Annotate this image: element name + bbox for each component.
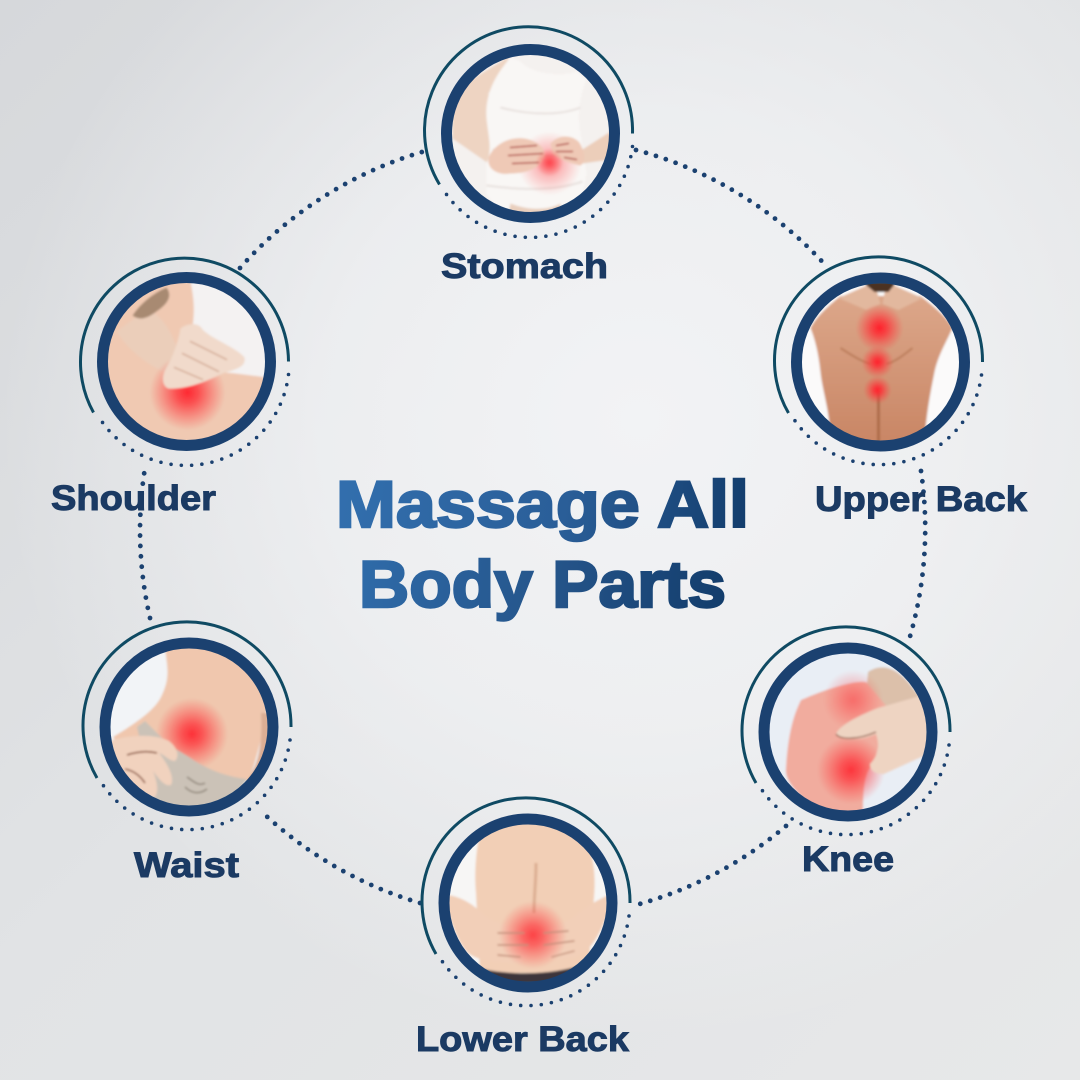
photo: upper back (800, 282, 960, 442)
dotted arc: shoulder (100, 374, 288, 465)
dotted arc: waist (103, 740, 290, 830)
ring: upper back (796, 278, 964, 446)
panel: upper back (775, 257, 983, 465)
dotted arc: lower back (442, 916, 629, 1006)
photo: shoulder (106, 282, 266, 442)
dotted connector circle (140, 150, 925, 905)
photo: lower back (448, 823, 608, 983)
ring: stomach (446, 50, 614, 218)
arc: shoulder (81, 258, 288, 413)
panel: knee (742, 627, 950, 835)
arc: lower back (422, 798, 630, 954)
label: stomach: Stomach (441, 247, 608, 286)
title (336, 467, 749, 621)
ring: knee (764, 648, 932, 816)
ring: lower back (444, 819, 612, 987)
label: waist: Waist (134, 846, 239, 885)
label: lower back: Lower Back (416, 1020, 630, 1059)
arc: knee (742, 627, 950, 783)
panel: waist (83, 622, 291, 830)
dotted arc: stomach (444, 146, 632, 237)
photo: waist (109, 647, 269, 807)
dotted arc: upper back (794, 375, 982, 465)
arc: waist (83, 622, 291, 778)
ring: waist (105, 643, 273, 811)
photo: knee (785, 666, 926, 810)
panel: lower back (422, 798, 630, 1006)
title: Massage All (336, 467, 749, 541)
ring: shoulder (102, 278, 270, 446)
label: shoulder: Shoulder (51, 479, 216, 518)
arc: stomach (425, 27, 633, 184)
dotted arc: knee (762, 745, 949, 835)
title: Body Parts (359, 547, 726, 621)
panel: shoulder (81, 258, 288, 465)
panel: stomach (425, 27, 633, 237)
photo: stomach (450, 54, 610, 214)
label: upper back: Upper Back (815, 480, 1028, 519)
label: knee: Knee (802, 840, 894, 879)
arc: upper back (775, 257, 983, 413)
